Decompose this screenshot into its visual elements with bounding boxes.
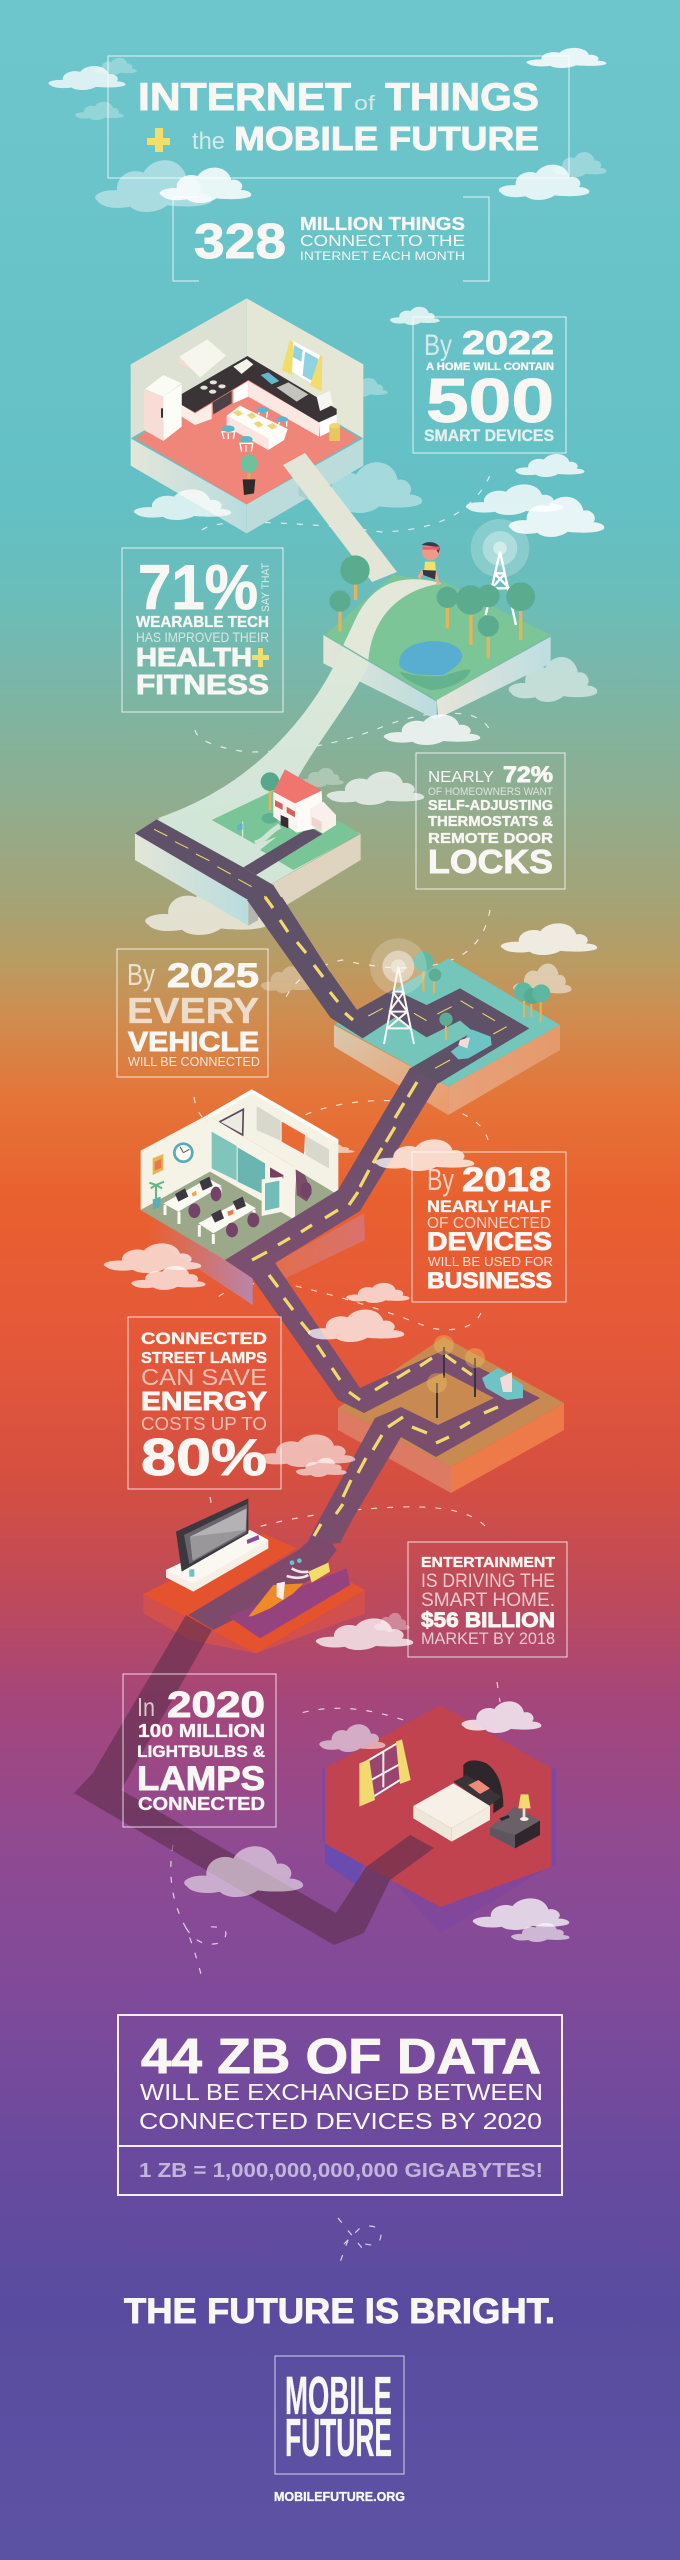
icon: house on plot <box>135 769 361 930</box>
title line one: THINGS <box>385 76 539 119</box>
panel: entertainment <box>408 1542 567 1657</box>
cloud beside road <box>501 923 597 955</box>
panel: by 2022: 2022 <box>462 324 554 361</box>
panel: in 2020: LAMPS <box>137 1760 265 1798</box>
panel: by 2022: SMART DEVICES <box>424 427 554 445</box>
text: gigabytes: 1 ZB = 1,000,000,000,000 GIGABYTES! <box>139 2160 543 2182</box>
callout: 328 million things: INTERNET EACH MONTH <box>300 251 465 263</box>
clouds in front of kitchen <box>48 48 606 537</box>
panel: in 2020: 100 MILLION <box>138 1721 265 1741</box>
text: exchanged between: WILL BE EXCHANGED BETWEEN <box>140 2079 543 2105</box>
title line one: of <box>354 93 376 115</box>
panel: by 2022: By <box>424 329 452 362</box>
logo: Mobile Future: MOBILE <box>285 2366 392 2426</box>
title line one: INTERNET <box>138 76 351 119</box>
panel: 71 percent wearable tech <box>122 548 283 712</box>
logo: Mobile Future: FUTURE <box>285 2408 392 2468</box>
panel: by 2025: VEHICLE <box>128 1026 259 1057</box>
panel: connected street lamps: CAN SAVE <box>141 1364 267 1390</box>
panel: connected street lamps: 80% <box>141 1429 267 1487</box>
icon: kitchen room <box>131 298 363 533</box>
cloud over dark road <box>184 1846 303 1897</box>
title line two: MOBILE FUTURE <box>234 120 539 157</box>
panel: by 2018: DEVICES <box>427 1228 552 1256</box>
panel: 71 percent wearable tech: HAS IMPROVED THEIR <box>136 629 269 645</box>
panel: nearly 72 percent: LOCKS <box>428 843 553 880</box>
callout: 328 million things: MILLION THINGS <box>300 214 465 234</box>
panel: by 2018: OF CONNECTED <box>427 1215 551 1232</box>
callout: 328 million things <box>173 197 489 281</box>
path from park to house <box>158 647 369 868</box>
icon: yellow plus <box>147 128 170 152</box>
icon: office room <box>141 1089 365 1305</box>
dashed connection lines <box>171 470 500 2268</box>
panel: in 2020: In <box>137 1692 155 1722</box>
callout: 328 million things: CONNECT TO THE <box>300 233 465 250</box>
heading: 44 ZB: 44 ZB OF DATA <box>141 2030 541 2084</box>
clouds around the road <box>104 1139 474 1477</box>
panel: entertainment: ENTERTAINMENT <box>421 1554 555 1571</box>
icon: street lamps and car <box>427 1335 523 1418</box>
panel: by 2018 <box>412 1152 566 1302</box>
panel: connected street lamps <box>128 1317 281 1489</box>
panel: nearly 72 percent <box>416 753 565 889</box>
dark road to bedroom <box>74 1615 434 1945</box>
panel: entertainment: SMART HOME. <box>421 1590 555 1611</box>
panel: by 2018: WILL BE USED FOR <box>428 1254 553 1269</box>
clouds around bedroom <box>319 1701 570 1942</box>
panel: by 2018: BUSINESS <box>427 1268 552 1293</box>
panel: entertainment: MARKET BY 2018 <box>421 1630 555 1648</box>
icon: street plot <box>338 1337 564 1493</box>
panel: by 2018: By <box>427 1162 454 1197</box>
panel: by 2025 <box>117 949 268 1077</box>
cloud under park <box>384 714 480 745</box>
lane markings <box>252 897 498 1536</box>
text: connected devices: CONNECTED DEVICES BY 2020 <box>139 2108 542 2134</box>
road: office and street run <box>225 1068 540 1547</box>
panel: connected street lamps: STREET LAMPS <box>141 1350 267 1367</box>
logo: Mobile Future <box>275 2356 404 2474</box>
panel: connected street lamps: ENERGY <box>141 1386 267 1416</box>
clouds around living room <box>316 1613 413 1650</box>
panel: by 2018: NEARLY HALF <box>427 1198 551 1216</box>
icon: living room with TV and sofa <box>143 1498 365 1653</box>
closing headline: THE FUTURE IS BRIGHT. <box>124 2292 555 2331</box>
panel: by 2018: 2018 <box>462 1161 551 1199</box>
icon: park with runner and tower <box>323 519 551 720</box>
panel: in 2020: CONNECTED <box>138 1794 265 1814</box>
panel: in 2020: LIGHTBULBS & <box>137 1742 265 1761</box>
panel: connected street lamps: CONNECTED <box>141 1329 267 1348</box>
panel: by 2025: 2025 <box>167 957 259 995</box>
panel: nearly 72 percent: 72% <box>503 762 553 787</box>
panel: 71 percent wearable tech: FITNESS <box>136 669 269 700</box>
panel: by 2025: EVERY <box>127 990 259 1031</box>
title line one <box>138 76 539 119</box>
panel: nearly 72 percent: THERMOSTATS & <box>428 813 553 830</box>
panel: 71 percent wearable tech: SAY THAT <box>260 563 272 612</box>
panel: nearly 72 percent: SELF-ADJUSTING <box>428 797 553 814</box>
panel: by 2025: By <box>127 957 155 992</box>
panel: entertainment: $56 BILLION <box>421 1609 555 1632</box>
title line two: the <box>192 128 225 155</box>
path from kitchen to park <box>283 453 397 582</box>
panel: 71 percent wearable tech: 71% <box>138 553 258 623</box>
panel: by 2025: WILL BE CONNECTED <box>128 1055 260 1069</box>
panel: by 2022: 500 <box>426 367 554 436</box>
website address: MOBILEFUTURE.ORG <box>274 2490 405 2504</box>
panel: 44 ZB of data <box>118 2015 562 2195</box>
road: long segment from house to tower <box>247 897 363 1038</box>
callout: 328 million things: 328 <box>194 215 286 269</box>
panel: entertainment: IS DRIVING THE <box>421 1571 555 1592</box>
panel: by 2022: A HOME WILL CONTAIN <box>426 361 554 373</box>
panel: in 2020: 2020 <box>167 1684 265 1725</box>
icon: bedroom <box>323 1705 556 1933</box>
panel: nearly 72 percent: REMOTE DOOR <box>428 830 553 847</box>
panel: nearly 72 percent: OF HOMEOWNERS WANT <box>428 786 553 798</box>
panel: by 2022 <box>413 317 566 453</box>
panel: connected street lamps: COSTS UP TO <box>141 1414 267 1434</box>
panel: 71 percent wearable tech: WEARABLE TECH <box>136 614 269 631</box>
icon: tower plot <box>330 938 560 1115</box>
panel: 71 percent wearable tech: HEALTH <box>136 642 252 672</box>
panel: nearly 72 percent: NEARLY <box>428 769 494 786</box>
panel: in 2020 <box>123 1674 276 1827</box>
title box <box>108 56 569 178</box>
clouds: back layer <box>75 58 607 1154</box>
